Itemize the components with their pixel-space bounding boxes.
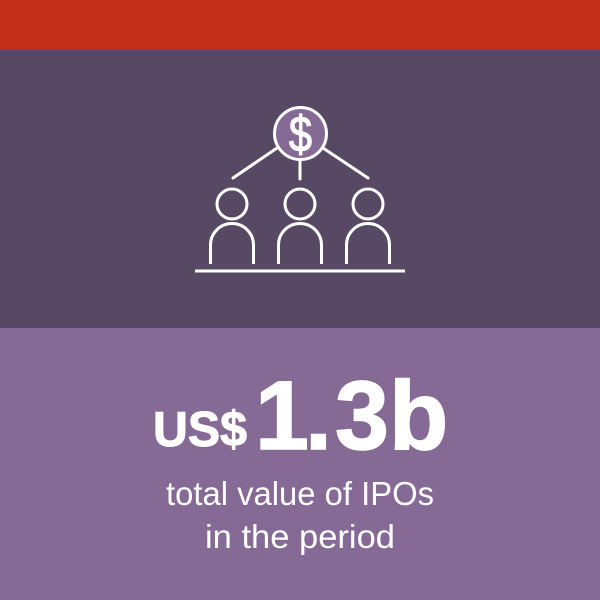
icon: person left [210, 189, 254, 264]
caption [166, 475, 434, 555]
panel: dark purple icon area [0, 50, 600, 328]
currency label: US$ [153, 403, 247, 457]
statistic: US$ 1.3b [153, 361, 448, 470]
panel: light purple statistic area [0, 328, 600, 600]
icon: person right [346, 189, 390, 264]
icon: person centre [278, 189, 322, 264]
caption line 1: total value of IPOs [166, 475, 434, 512]
icon: dollar coin: $ [289, 106, 312, 162]
ground line [195, 270, 405, 272]
connector lines [233, 148, 368, 179]
value: 1.3b [255, 361, 448, 470]
icon: investors linked to a dollar coin [195, 106, 405, 271]
caption line 2: in the period [205, 518, 395, 555]
panel: red top band [0, 0, 600, 50]
icon: dollar coin [274, 106, 326, 162]
